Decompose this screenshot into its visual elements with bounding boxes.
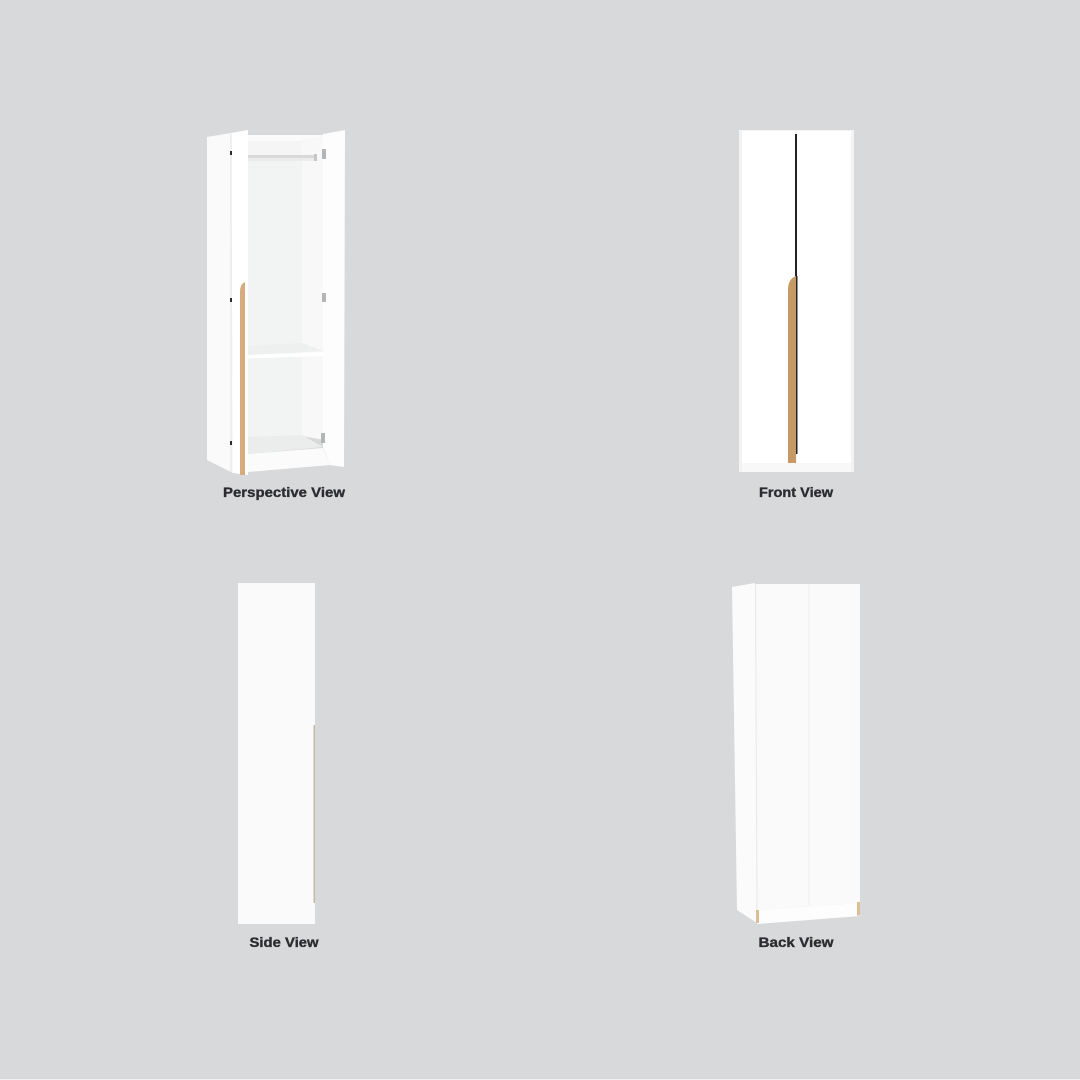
- cabinet floor and plinth: [248, 435, 330, 472]
- interior back wall: [248, 137, 302, 437]
- left open door: [230, 130, 248, 475]
- label: side view: Side View: [250, 934, 319, 950]
- plinth: [742, 463, 851, 472]
- back panel: [755, 584, 860, 910]
- shelf: [248, 343, 323, 358]
- wood edge: [314, 725, 315, 903]
- wood handle: [788, 276, 796, 463]
- side panel: [238, 583, 315, 924]
- carcass: [739, 130, 854, 472]
- label: back view: Back View: [758, 934, 834, 950]
- hanging rail: [248, 154, 317, 161]
- panel: front view wardrobe: [739, 130, 854, 472]
- plinth: [757, 903, 860, 924]
- wood edges: [756, 910, 759, 923]
- panel: perspective view wardrobe: [207, 130, 345, 475]
- centre seam: [808, 584, 810, 906]
- door gap: [795, 134, 797, 454]
- label: perspective view: Perspective View: [223, 484, 345, 500]
- right door: [797, 131, 851, 463]
- left door: [742, 131, 795, 463]
- label: front view: Front View: [759, 484, 833, 500]
- left side panel: [207, 133, 233, 473]
- interior top: [248, 135, 324, 141]
- panel: side view wardrobe: [238, 583, 315, 924]
- side panel: [732, 583, 757, 923]
- panel: back view wardrobe: [732, 583, 860, 924]
- interior right wall: [302, 137, 324, 440]
- right open door: [321, 130, 345, 467]
